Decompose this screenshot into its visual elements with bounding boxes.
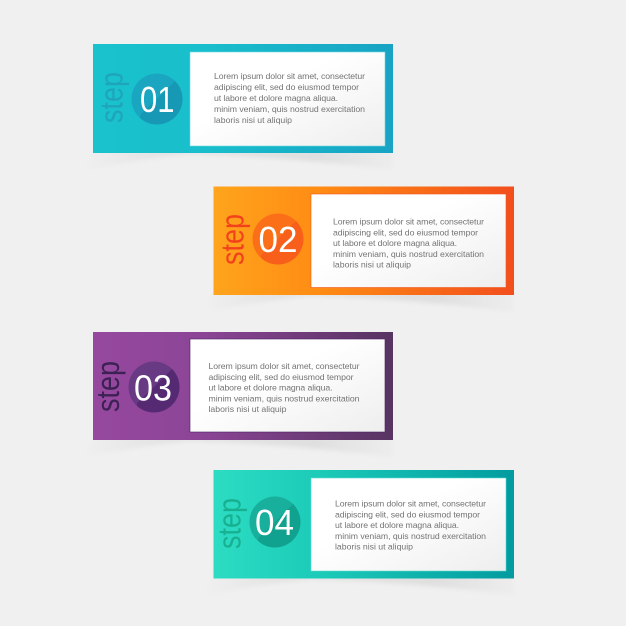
card 1 band — [93, 44, 393, 153]
step label 4: step — [212, 498, 248, 549]
body text 4: Lorem ipsum dolor sit amet, consectetur — [335, 498, 486, 508]
body text 4: adipiscing elit, sed do eiusmod tempor — [335, 510, 480, 520]
text panel 2 — [311, 194, 506, 288]
number badge 2 — [252, 214, 304, 264]
body text 2: laboris nisi ut aliquip — [333, 260, 411, 270]
body text 4: ut labore et dolore magna aliqua. — [335, 520, 459, 530]
card shadow 2 — [202, 292, 514, 313]
card shadow 4 — [202, 575, 514, 596]
body text 1: minim veniam, quis nostrud exercitation — [214, 104, 365, 114]
panel: step 2 — [202, 186, 514, 313]
body text 1: Lorem ipsum dolor sit amet, consectetur — [214, 71, 365, 81]
body text 2: ut labore et dolore magna aliqua. — [333, 238, 457, 248]
card 4 band — [214, 470, 514, 578]
step label 3: step — [90, 361, 126, 412]
body text 2: adipiscing elit, sed do eiusmod tempor — [333, 228, 478, 238]
panel: step 1 — [82, 44, 393, 171]
number badge 1: 01 — [140, 79, 174, 120]
body text 3: Lorem ipsum dolor sit amet, consectetur — [208, 361, 360, 371]
body text 3: laboris nisi ut aliquip — [208, 404, 287, 414]
body text 4: minim veniam, quis nostrud exercitation — [335, 531, 486, 541]
body text 4: laboris nisi ut aliquip — [335, 542, 413, 552]
text panel 3 — [190, 339, 385, 432]
body text 3: minim veniam, quis nostrud exercitation — [208, 394, 360, 404]
body text 1: ut labore et dolore magna aliqua. — [214, 93, 338, 103]
body text 3: adipiscing elit, sed do eiusmod tempor — [208, 372, 354, 382]
body text 3: ut labore et dolore magna aliqua. — [208, 382, 332, 392]
number badge 4: 04 — [255, 502, 294, 543]
step label 1: step — [94, 72, 130, 123]
step label 2: step — [214, 214, 250, 265]
body text 2: minim veniam, quis nostrud exercitation — [333, 249, 484, 259]
card shadow 3 — [82, 437, 393, 458]
card shadow 1 — [82, 150, 393, 171]
card 2 band — [214, 186, 514, 295]
card 3 band — [93, 332, 393, 440]
body text 1: adipiscing elit, sed do eiusmod tempor — [214, 82, 359, 92]
number badge 3 — [128, 362, 180, 412]
number badge 4 — [250, 496, 300, 548]
body text 2: Lorem ipsum dolor sit amet, consectetur — [333, 216, 484, 226]
panel: step 4 — [202, 470, 514, 596]
number badge 2: 02 — [258, 219, 298, 260]
number badge 3: 03 — [134, 368, 172, 408]
panel: step 3 — [82, 332, 393, 458]
number badge 1 — [132, 74, 182, 124]
text panel 1 — [190, 52, 385, 146]
body text 1: laboris nisi ut aliquip — [214, 115, 292, 125]
text panel 4 — [311, 478, 506, 571]
